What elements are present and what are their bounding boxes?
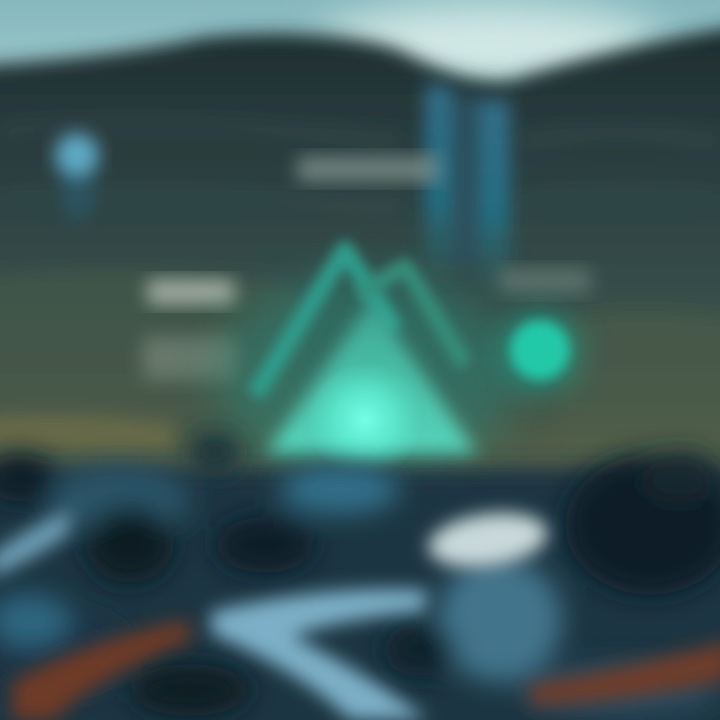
label: left text block upper [147, 279, 235, 305]
waterfall [425, 85, 510, 290]
icon: glowing triangles [215, 250, 515, 485]
label: right text block [499, 268, 591, 294]
icon: glowing green circle [494, 306, 586, 398]
sky [0, 0, 720, 130]
orange logs [12, 620, 720, 720]
icon: blue marker at top left [55, 133, 99, 221]
foreground rocks and water [0, 432, 720, 720]
label: left text block lower [142, 336, 238, 380]
label: top centre text block [297, 156, 439, 182]
mountains and hillside [0, 24, 720, 480]
